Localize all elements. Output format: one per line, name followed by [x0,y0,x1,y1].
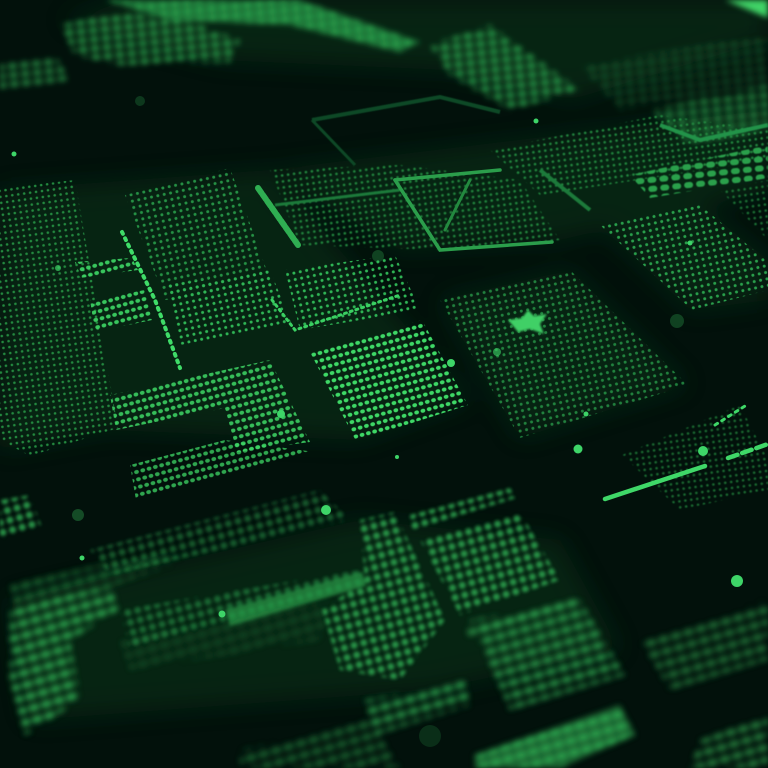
upper right circuit traces [270,97,768,250]
icon: star-shaped bright cluster [508,310,547,334]
panel: right centre dotted block [440,270,688,438]
panel: lower right scattered block [622,405,768,510]
panel: bright lower stripes [130,440,315,500]
panel: bright central block [310,320,468,441]
panel: left bright traces [75,258,152,332]
panel: central dotted grid [165,270,292,345]
panel: bright block left [110,360,310,452]
panel: left dim dotted block [0,180,118,456]
lower blurred circuit blocks [0,488,560,680]
panel: upper centre dotted block [125,168,272,300]
top blurred circuit band [0,0,768,145]
bright accent bars at right [605,406,768,499]
bottom heavily blurred blocks [10,555,768,768]
panel: upper right striped block [600,205,768,310]
bright circuit traces [122,170,552,368]
